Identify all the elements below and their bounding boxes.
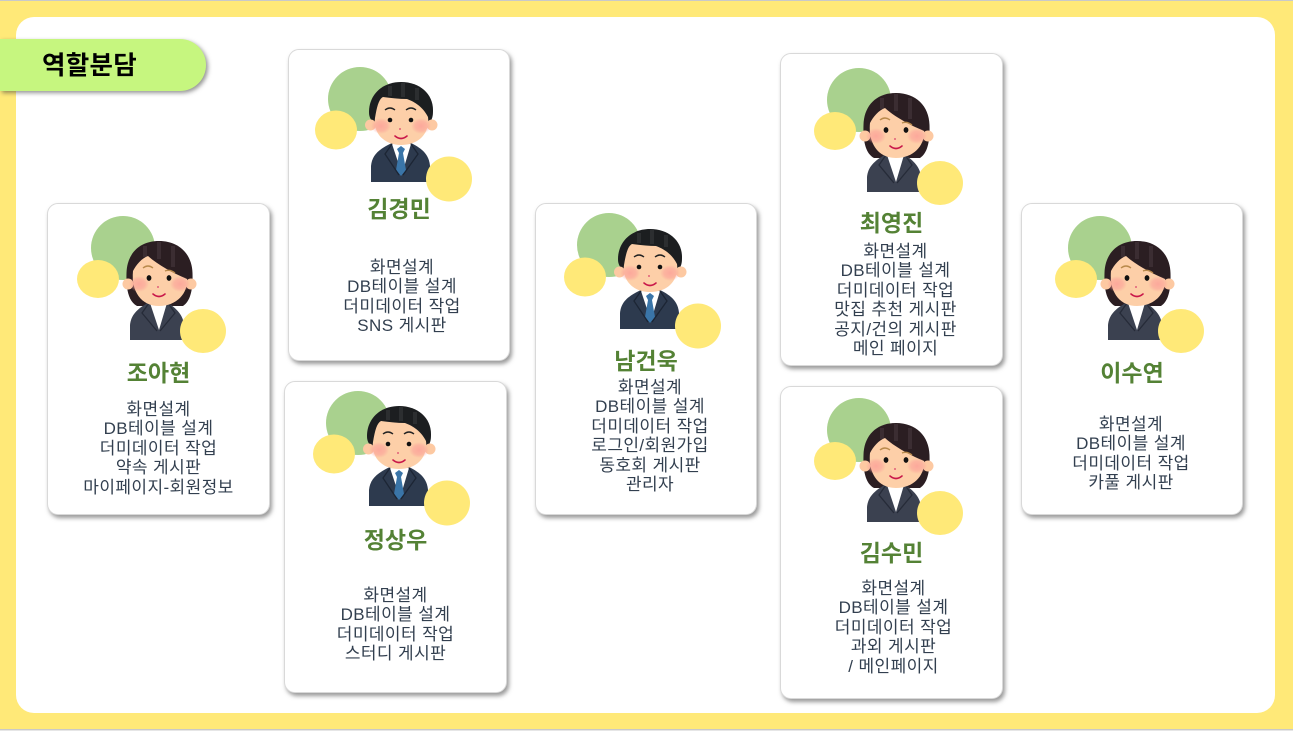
role list: DB테이블 설계 — [841, 261, 950, 280]
role list: 더미데이터 작업 — [835, 618, 952, 637]
role list: 약속 게시판 — [116, 458, 201, 477]
role list — [337, 586, 454, 663]
role list: 화면설계 — [363, 586, 428, 605]
illustration: woman with circles — [814, 68, 963, 205]
role list: / 메인페이지 — [848, 657, 939, 676]
role list — [343, 258, 461, 335]
role list: DB테이블 설계 — [104, 419, 213, 438]
name: 김수민 — [860, 540, 923, 566]
role list: DB테이블 설계 — [839, 598, 948, 617]
role list: 공지/건의 게시판 — [834, 320, 957, 339]
illustration: woman with circles — [814, 398, 963, 535]
name: 남건욱 — [614, 348, 678, 374]
role list: 더미데이터 작업 — [591, 417, 709, 436]
role list: 스터디 게시판 — [345, 644, 446, 663]
role list — [835, 579, 952, 676]
role list: 더미데이터 작업 — [337, 625, 454, 644]
role list: DB테이블 설계 — [595, 397, 705, 416]
name: 정상우 — [364, 527, 427, 553]
card: 김수민 — [780, 386, 1003, 699]
role list: 로그인/회원가입 — [591, 436, 709, 455]
role list: 더미데이터 작업 — [100, 439, 217, 458]
role list: 화면설계 — [126, 400, 191, 419]
role list — [1072, 415, 1190, 492]
illustration: man with circles — [313, 391, 470, 526]
role list — [591, 378, 709, 494]
illustration: woman with circles — [77, 216, 226, 353]
role list: SNS 게시판 — [357, 316, 447, 335]
card: 남건욱 — [535, 203, 757, 515]
illustration: woman with circles — [1055, 216, 1204, 353]
role list: 화면설계 — [863, 242, 928, 261]
role list: 관리자 — [626, 475, 674, 494]
card: 최영진 — [780, 53, 1003, 366]
role list: 더미데이터 작업 — [343, 297, 461, 316]
role list: 맛집 추천 게시판 — [834, 300, 957, 319]
role list — [83, 400, 234, 497]
role list: 마이페이지-회원정보 — [83, 478, 234, 497]
name: 최영진 — [860, 210, 923, 236]
role list: 화면설계 — [861, 579, 926, 598]
role list: 화면설계 — [1099, 415, 1163, 434]
name: 조아현 — [127, 360, 190, 386]
role list: 과외 게시판 — [851, 637, 936, 656]
name: 김경민 — [367, 196, 431, 222]
illustration: man with circles — [315, 67, 472, 202]
role list: 메인 페이지 — [853, 339, 938, 358]
role list: DB테이블 설계 — [341, 605, 450, 624]
role list: 더미데이터 작업 — [1072, 454, 1190, 473]
card: 이수연 — [1021, 203, 1243, 515]
role list: 카풀 게시판 — [1088, 473, 1174, 492]
illustration: man with circles — [564, 213, 721, 348]
role list — [834, 242, 957, 358]
role list: 더미데이터 작업 — [837, 281, 954, 300]
card: 김경민 — [288, 49, 510, 361]
role list: 화면설계 — [370, 258, 434, 277]
title banner — [0, 39, 206, 91]
role list: DB테이블 설계 — [1076, 434, 1186, 453]
role list: 동호회 게시판 — [599, 456, 701, 475]
card: 조아현 — [47, 203, 270, 515]
name: 이수연 — [1100, 360, 1164, 386]
role list: 화면설계 — [618, 378, 682, 397]
role list: DB테이블 설계 — [347, 277, 457, 296]
card: 정상우 — [284, 381, 507, 693]
title banner: 역할분담 — [42, 52, 137, 80]
